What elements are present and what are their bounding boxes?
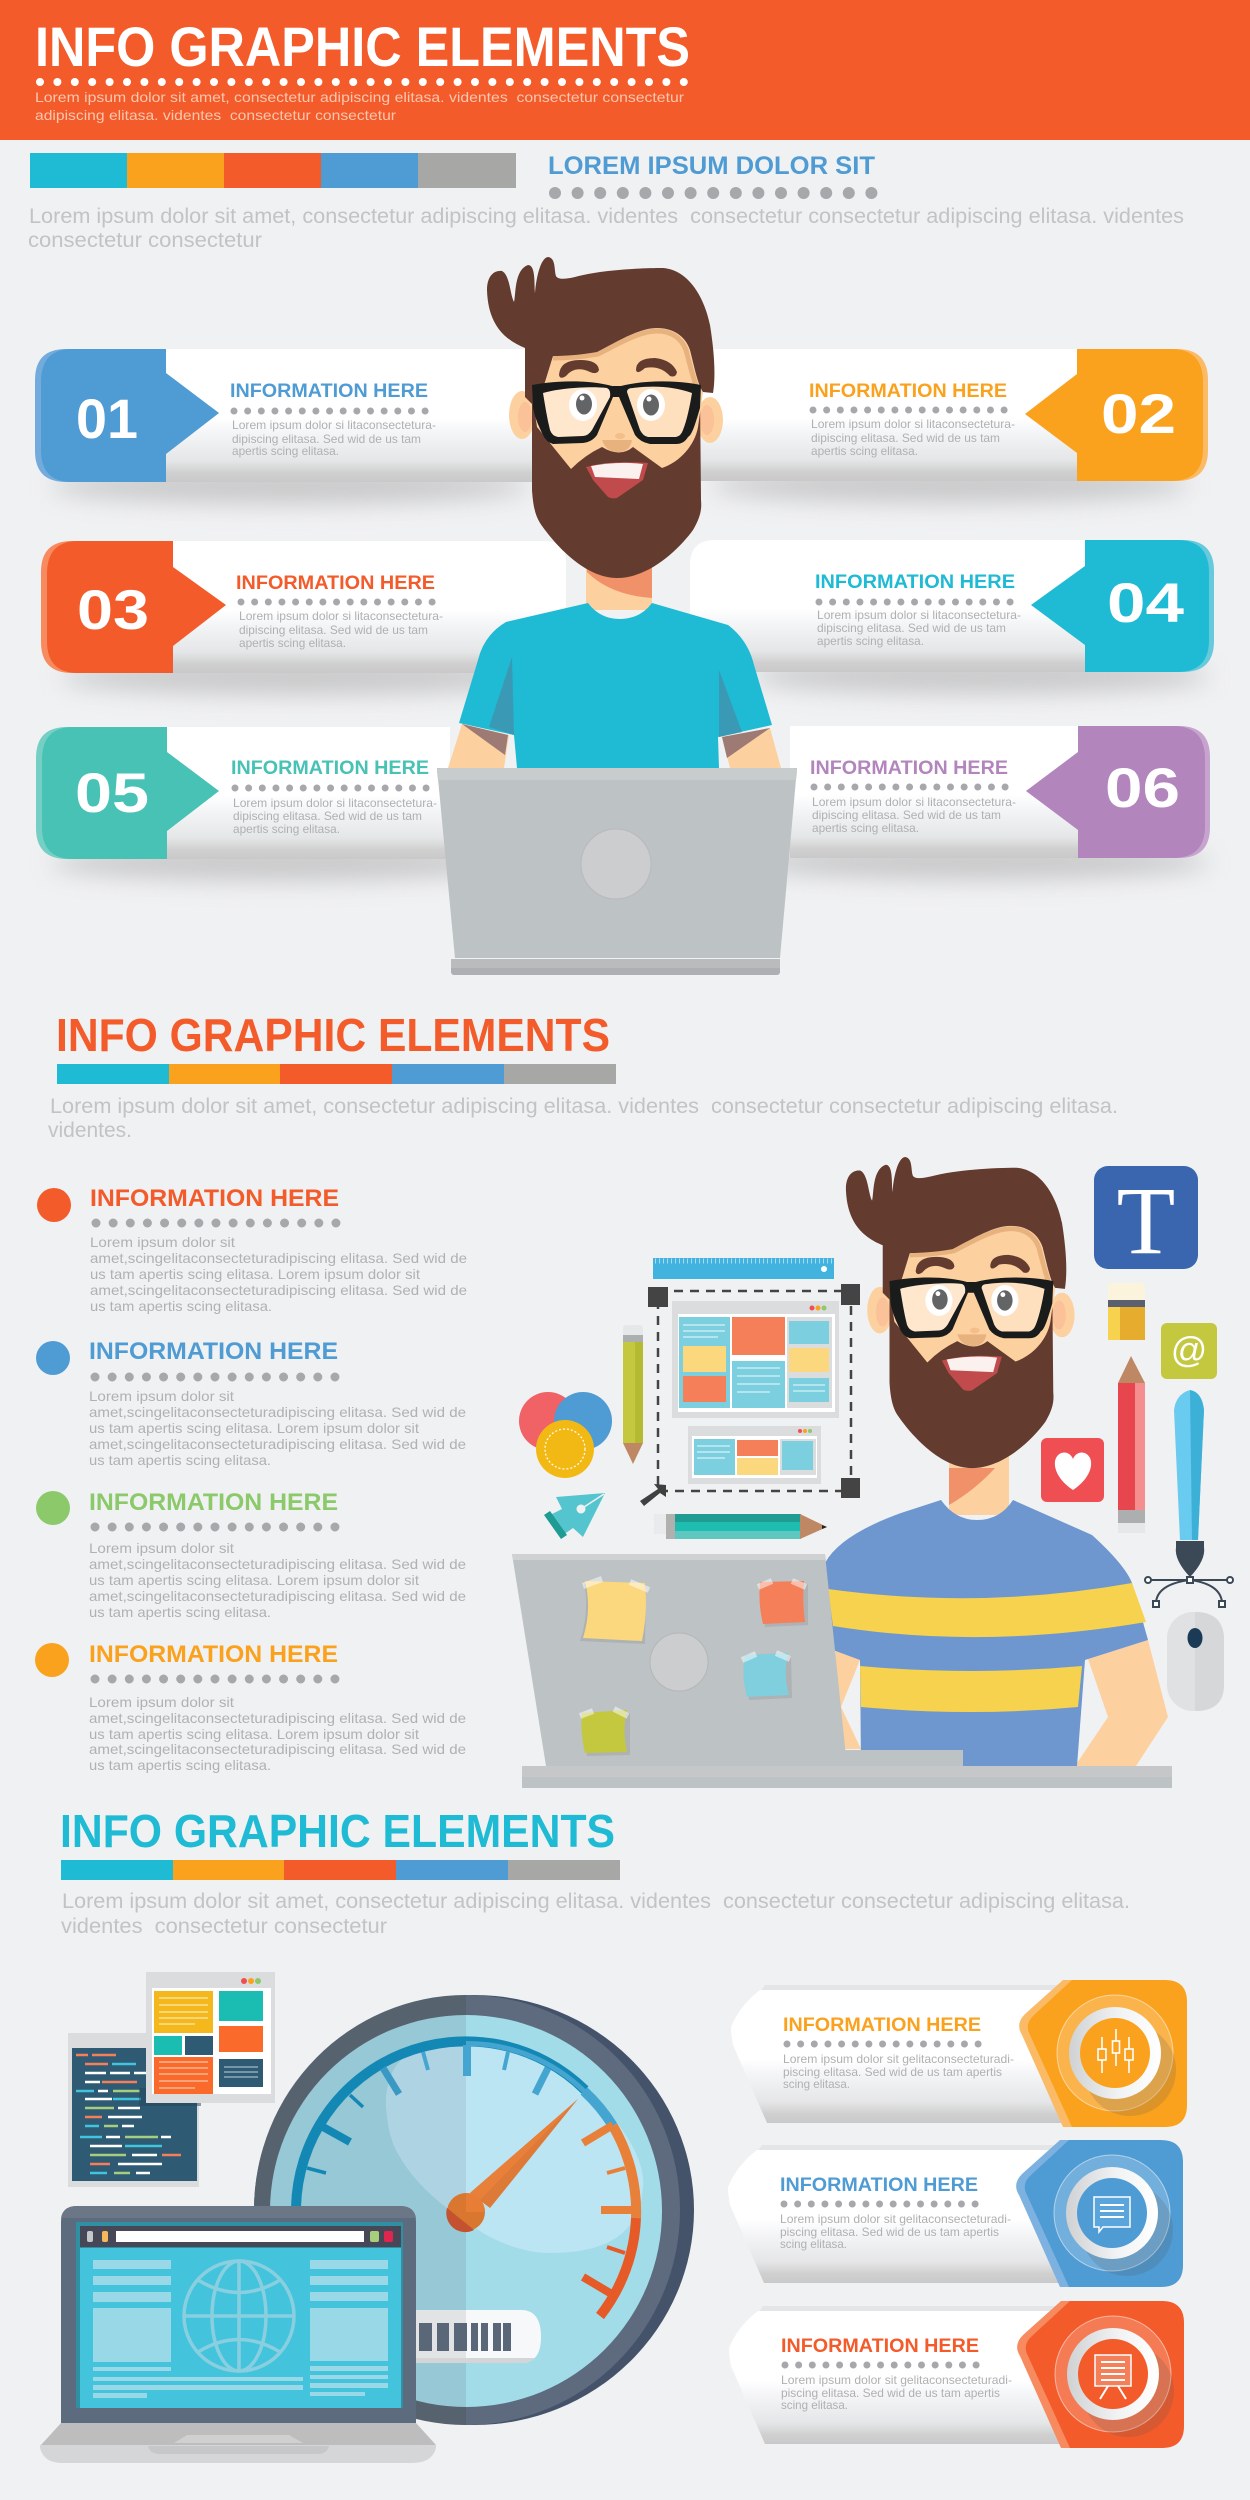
icon: ruler [653,1258,834,1279]
number tab [1025,349,1203,481]
list item 4: amet,scingelitaconsecteturadipiscing elitasa. Sed wid de [89,1710,466,1726]
card title: INFORMATION HERE [230,381,428,402]
card title: INFORMATION HERE [809,381,1007,402]
list item 1: INFORMATION HERE [90,1185,339,1212]
man: head [846,1157,1075,1468]
desk [522,1750,1172,1788]
body: dipiscing elitasa. Sed wid de us tam [232,432,421,446]
body: scing elitasa. [780,2237,847,2251]
body: dipiscing elitasa. Sed wid de us tam [233,809,422,823]
list item 2: amet,scingelitaconsecteturadipiscing elitasa. Sed wid de [89,1436,466,1452]
icon: T tile [1094,1166,1198,1274]
body: apertis scing elitasa. [811,444,918,458]
header text [35,89,684,123]
info card B [728,2140,1183,2287]
icon: mouse [1167,1612,1224,1711]
header title: INFO GRAPHIC ELEMENTS [35,15,690,78]
body: dipiscing elitasa. Sed wid de us tam [811,431,1000,445]
dots [241,598,434,606]
list item 4: us tam apertis scing elitasa. Lorem ipsum dolor sit [89,1726,419,1742]
card title: INFORMATION HERE [815,572,1015,593]
list item 3: amet,scingelitaconsecteturadipiscing elitasa. Sed wid de [89,1556,466,1572]
list item 4 [35,1641,466,1773]
body [811,417,1015,458]
man: arm and torso [820,1450,1168,1766]
body: apertis scing elitasa. [233,822,340,836]
list item 3: INFORMATION HERE [89,1489,338,1516]
laptop base [41,2423,436,2445]
dots [235,784,428,792]
body: scing elitasa. [783,2077,850,2091]
icon: presentation board [1055,2316,1174,2437]
laptop [437,768,797,975]
list item 1: amet,scingelitaconsecteturadipiscing elitasa. Sed wid de [90,1250,467,1266]
body [783,2052,1014,2091]
list item 3 [36,1489,466,1620]
laptop lid with sticky notes [512,1554,847,1766]
icon: yellow pencil [623,1325,643,1464]
list item 2: amet,scingelitaconsecteturadipiscing elitasa. Sed wid de [89,1404,466,1420]
section 2 paragraph: videntes. [48,1119,132,1142]
hexagon tab [1028,1980,1187,2127]
header text: Lorem ipsum dolor sit amet, consectetur adipiscing elitasa. videntes consectetur consectetur [35,89,684,105]
list item 2 [36,1338,466,1468]
hexagon tab [1026,2301,1184,2448]
body: apertis scing elitasa. [239,636,346,650]
body: Lorem ipsum dolor si litaconsectetura- [817,608,1021,622]
dots [819,598,1012,606]
gauge needle [446,2099,578,2232]
gauge scale [296,2041,636,2316]
body: Lorem ipsum dolor si litaconsectetura- [232,418,436,432]
body [239,609,443,650]
section 2 colour bar [57,1064,616,1084]
section 3 colour bar [61,1860,620,1880]
body: Lorem ipsum dolor si litaconsectetura- [233,796,437,810]
number: 01 [76,387,138,450]
body: dipiscing elitasa. Sed wid de us tam [817,621,1006,635]
card 06 [750,726,1210,880]
list item 2: Lorem ipsum dolor sit [89,1388,234,1404]
body [232,418,436,458]
icon: red pencil [1118,1356,1145,1533]
intro paragraph [28,205,1184,252]
body: dipiscing elitasa. Sed wid de us tam [239,623,428,637]
list item 2: us tam apertis scing elitasa. Lorem ipsum dolor sit [89,1420,419,1436]
body [781,2373,1012,2412]
card 01 [35,349,535,504]
list item 2: INFORMATION HERE [89,1338,338,1365]
intro paragraph: consectetur consectetur [28,229,262,252]
section 2 paragraph: Lorem ipsum dolor sit amet, consectetur adipiscing elitasa. videntes consectetur consectetur adipiscing elitasa. [50,1095,1118,1118]
subheading: LOREM IPSUM DOLOR SIT [548,152,875,180]
info card C [729,2301,1184,2448]
t-shirt [459,603,772,768]
speedometer gauge [254,1995,694,2425]
card 05 [36,727,510,881]
man with laptop illustration [437,257,797,975]
list item 4: INFORMATION HERE [89,1641,338,1668]
body: dipiscing elitasa. Sed wid de us tam [812,808,1001,822]
body: apertis scing elitasa. [812,821,919,835]
body [812,795,1016,835]
card title: INFORMATION HERE [236,573,435,594]
icon: chat bubble [1054,2155,1173,2276]
code window [68,2033,199,2187]
body: Lorem ipsum dolor sit gelitaconsecteturadi- [783,2052,1014,2066]
body [780,2212,1011,2251]
list item 3: amet,scingelitaconsecteturadipiscing elitasa. Sed wid de [89,1588,466,1604]
number tab [47,541,226,673]
selection frame [648,1284,860,1498]
intro paragraph: Lorem ipsum dolor sit amet, consectetur adipiscing elitasa. videntes consectetur consectetur adipiscing elitasa. videntes [29,205,1184,228]
list item 4: us tam apertis scing elitasa. [89,1757,271,1773]
list item 2: us tam apertis scing elitasa. [89,1452,271,1468]
card 04 [690,540,1214,694]
number tab [1026,726,1205,858]
icon: globe [184,2261,294,2371]
section 3 paragraph: Lorem ipsum dolor sit amet, consectetur adipiscing elitasa. videntes consectetur consectetur adipiscing elitasa. [62,1890,1130,1913]
dots [814,784,1007,790]
icon: T tile: T [1117,1167,1175,1274]
dots [787,2040,980,2048]
number: 04 [1107,571,1184,634]
odometer pill [400,2310,541,2363]
list item 3: us tam apertis scing elitasa. Lorem ipsum dolor sit [89,1572,419,1588]
number tab [41,349,219,482]
section 2 title: INFO GRAPHIC ELEMENTS [56,1009,610,1061]
list item 1: us tam apertis scing elitasa. [90,1298,272,1314]
list item 4: Lorem ipsum dolor sit [89,1694,234,1710]
neck [586,560,652,610]
body: Lorem ipsum dolor si litaconsectetura- [811,417,1015,431]
body: piscing elitasa. Sed wid de us tam apertis [780,2225,999,2239]
card title: INFORMATION HERE [783,2015,981,2036]
body [233,796,437,836]
body: scing elitasa. [781,2398,848,2412]
subheading dots [555,187,872,199]
card title: INFORMATION HERE [780,2175,978,2196]
small web layout window [688,1426,821,1484]
section 2 paragraph [48,1095,1118,1142]
dots [785,2362,978,2368]
arms [448,724,781,768]
card title: INFORMATION HERE [810,758,1008,779]
designer illustration [512,1157,1233,1788]
list item 1 [37,1185,467,1314]
dots [234,408,427,414]
list item 1: Lorem ipsum dolor sit [90,1234,235,1250]
icon: cursor arrow [640,1484,666,1506]
number tab [42,727,219,859]
list item 1: amet,scingelitaconsecteturadipiscing elitasa. Sed wid de [90,1282,467,1298]
section 3 title: INFO GRAPHIC ELEMENTS [60,1805,615,1857]
body [817,608,1021,648]
list item 3: us tam apertis scing elitasa. [89,1604,271,1620]
header dotted rule [40,78,684,86]
info card A [731,1980,1187,2127]
dots [813,406,1006,414]
section 3 paragraph [61,1890,1130,1938]
card 03 [41,541,566,695]
body: Lorem ipsum dolor si litaconsectetura- [239,609,443,623]
icon: eraser [1108,1283,1145,1340]
header banner [0,0,1250,140]
number: 06 [1105,756,1180,819]
gauge highlight [386,2045,466,2222]
icon: paper plane [544,1493,605,1539]
body: piscing elitasa. Sed wid de us tam apertis [783,2065,1002,2079]
body: Lorem ipsum dolor sit gelitaconsecteturadi- [780,2212,1011,2226]
body: Lorem ipsum dolor sit gelitaconsecteturadi- [781,2373,1012,2387]
icon: at tile: @ [1171,1329,1207,1370]
list item 4: amet,scingelitaconsecteturadipiscing elitasa. Sed wid de [89,1741,466,1757]
laptop with globe website [40,2206,436,2463]
icon: teal pencil [654,1514,827,1539]
dots [784,2200,977,2208]
number: 05 [75,761,149,824]
hexagon tab [1025,2140,1183,2287]
card 02 [698,349,1208,503]
large web layout window [672,1301,839,1418]
header text: adipiscing elitasa. videntes consectetur consectetur [35,107,396,123]
card title: INFORMATION HERE [781,2336,979,2357]
icon: sliders [1057,1995,1176,2116]
website blocks [93,2260,388,2398]
section 3 paragraph: videntes consectetur consectetur [61,1915,387,1938]
icon: at tile [1161,1323,1217,1379]
body: piscing elitasa. Sed wid de us tam apertis [781,2386,1000,2400]
icon: heart tile [1041,1438,1104,1502]
icon: colour circles [519,1392,612,1478]
card title: INFORMATION HERE [231,758,429,779]
number: 02 [1101,382,1176,445]
layout window [139,1972,275,2106]
body: apertis scing elitasa. [232,444,339,458]
number tab [1031,540,1209,672]
colour bar [30,153,516,188]
number: 03 [77,578,149,641]
body: apertis scing elitasa. [817,634,924,648]
head [487,257,723,578]
icon: pen tool [1145,1390,1233,1607]
list item 3: Lorem ipsum dolor sit [89,1540,234,1556]
body: Lorem ipsum dolor si litaconsectetura- [812,795,1016,809]
list item 1: us tam apertis scing elitasa. Lorem ipsum dolor sit [90,1266,420,1282]
